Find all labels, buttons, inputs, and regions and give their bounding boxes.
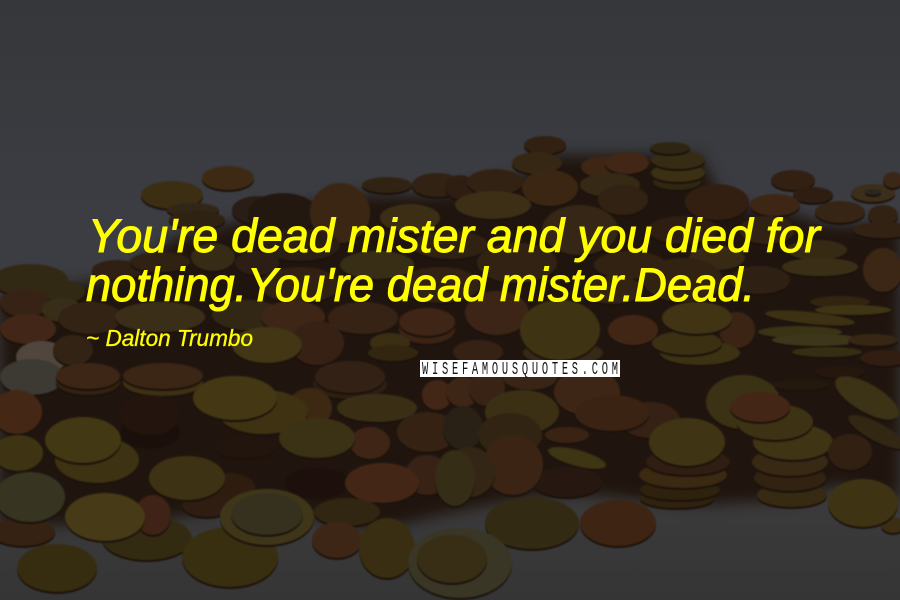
coins: centre piles (0, 300, 755, 410)
coins: back row (141, 136, 900, 255)
watermark badge: WISEFAMOUSQUOTES.COM (422, 360, 618, 380)
coins: lower centre and right cluster (408, 368, 900, 598)
quote line 2: nothing.You're dead mister.Dead. (86, 258, 755, 311)
shadow under coin pile (0, 155, 900, 530)
coins: lower left cluster (0, 376, 457, 592)
quote line 1: You're dead mister and you died for (88, 209, 822, 262)
coins: right stacks of strips (758, 296, 900, 390)
quote text (86, 209, 822, 311)
author attribution: ~ Dalton Trumbo (86, 325, 253, 351)
coins: middle band behind quote (0, 229, 900, 344)
coin pile photo (0, 136, 900, 598)
